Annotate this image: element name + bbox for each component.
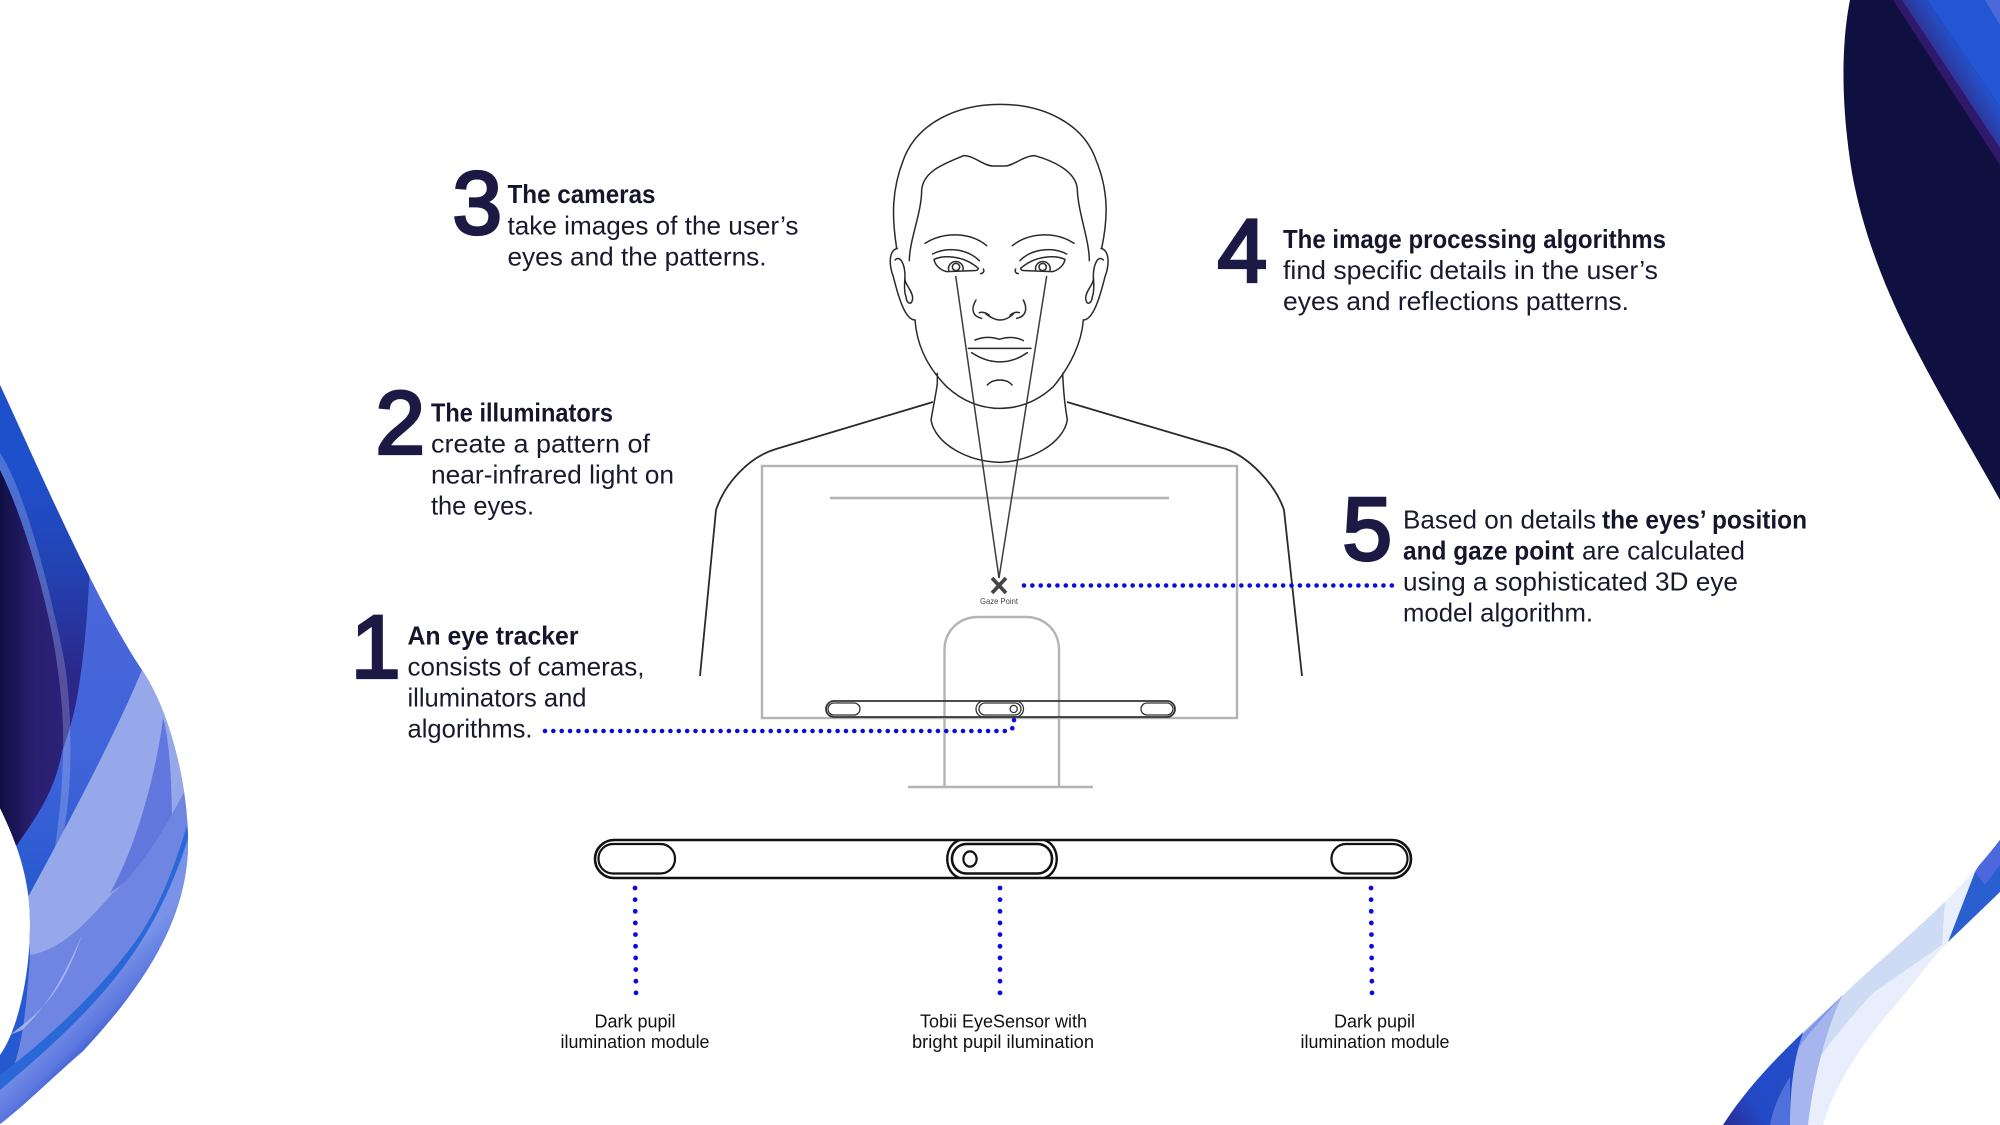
step 2: the illuminators: create a pattern of [431,428,651,458]
swoosh: bottom right decorative wave [1720,830,2000,1125]
step 2: the illuminators [376,372,674,520]
label: Tobii EyeSensor: Tobii EyeSensor with [920,1012,1087,1032]
label: Tobii EyeSensor [912,1012,1094,1052]
step 4: image processing algorithms: The image processing algorithms [1283,224,1666,254]
step 3: the cameras: eyes and the patterns. [508,242,766,272]
label: left dark pupil module: Dark pupil [594,1012,676,1032]
step 3: the cameras: take images of the user’s [508,210,798,240]
step 1: an eye tracker: consists of cameras, [408,652,644,682]
step 5: gaze point calculation: using a sophisticated 3D eye [1403,566,1738,596]
head and face [890,104,1108,462]
small eye tracker on monitor [826,701,1175,717]
dotted leader: gaze point to step 5 [1024,583,1393,588]
dotted leader: left dark pupil module [635,888,636,993]
step 5: gaze point calculation: 5 [1342,478,1392,578]
gaze point marker: Gaze Point [980,596,1019,606]
gaze point marker [980,578,1019,606]
step 5: gaze point calculation: the eyes’ position [1602,504,1807,534]
dotted leader: right dark pupil module [1371,888,1372,993]
label: right dark pupil module: Dark pupil [1334,1012,1415,1032]
step 1: an eye tracker [351,596,644,744]
step 5: gaze point calculation: and gaze point [1403,536,1574,566]
step 3: the cameras: The cameras [508,179,656,209]
step 5: gaze point calculation: are calculated [1582,536,1745,566]
step 1: an eye tracker: illuminators and [408,682,586,712]
step 3: the cameras: 3 [452,152,502,252]
step 3: the cameras [452,152,798,272]
label: Tobii EyeSensor: bright pupil ilumination [912,1032,1094,1052]
step 5: gaze point calculation: model algorithm. [1403,598,1593,628]
gaze sight lines from eyes to gaze point [956,276,1047,578]
step 5: gaze point calculation: Based on details [1403,504,1596,534]
dotted leader: centre EyeSensor [998,888,1002,993]
step 1: an eye tracker: 1 [351,596,400,696]
label: right dark pupil module [1300,1012,1450,1052]
step 2: the illuminators: The illuminators [431,398,613,428]
step 1: an eye tracker: algorithms. [408,714,532,744]
shoulders [700,402,1302,676]
monitor outline [762,466,1237,787]
step 4: image processing algorithms: find specific details in the user’s [1283,255,1658,285]
dotted leader: step 1 to eye tracker [545,720,1014,731]
step 4: image processing algorithms [1218,200,1666,316]
step 1: an eye tracker: An eye tracker [408,620,578,650]
step 5: gaze point calculation [1342,478,1807,628]
person line drawing: head, neck and shoulders [700,104,1302,676]
swoosh: left decorative wave [0,380,200,1125]
swoosh: top right decorative wave [1840,0,2000,500]
large eye tracker diagram [595,840,1411,878]
step 2: the illuminators: 2 [376,372,425,472]
step 4: image processing algorithms: eyes and reflections patterns. [1283,286,1629,316]
label: left dark pupil module: ilumination module [560,1032,710,1052]
step 2: the illuminators: the eyes. [431,490,534,520]
label: left dark pupil module [560,1012,710,1052]
label: right dark pupil module: ilumination module [1300,1032,1450,1052]
step 4: image processing algorithms: 4 [1218,200,1267,300]
step 2: the illuminators: near-infrared light on [431,460,674,490]
